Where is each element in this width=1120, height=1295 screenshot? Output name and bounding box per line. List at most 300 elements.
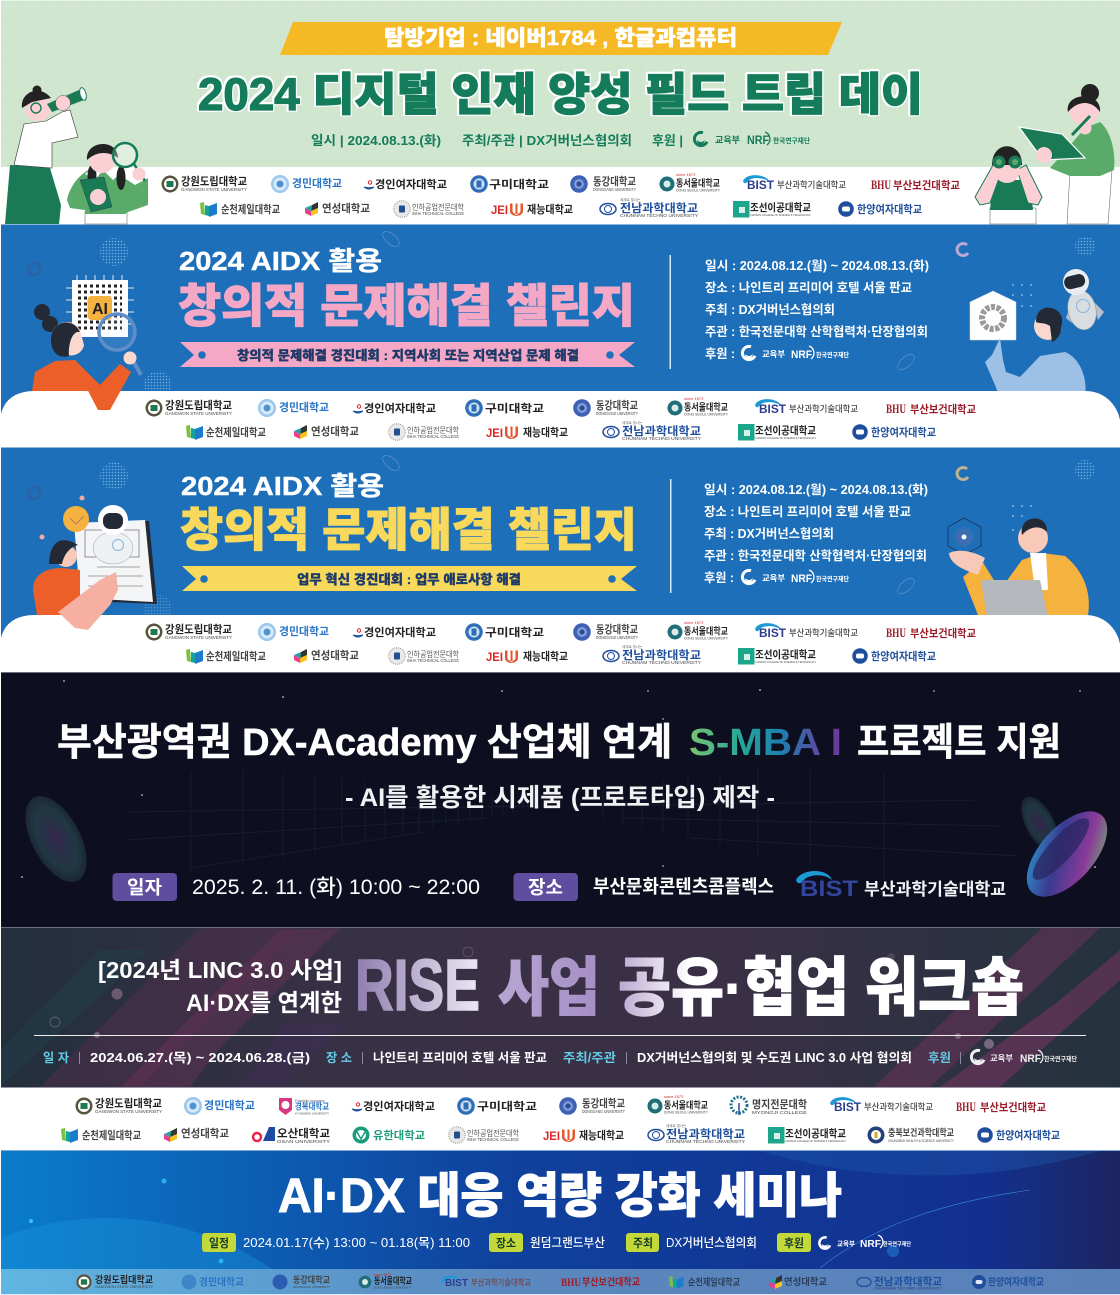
logo: JEI 재능대학교: 재능대학교 bbox=[523, 425, 568, 439]
logo: 순천제일대학교: 순천제일대학교 bbox=[221, 202, 280, 216]
logo: 강원도립대학교 bbox=[146, 398, 232, 416]
event details: NRF bbox=[791, 573, 812, 585]
logo: 전남과학대학교 bbox=[603, 420, 701, 441]
logo rows bbox=[61, 1094, 1060, 1144]
logo: 경민대학교 bbox=[184, 1097, 255, 1115]
schedule bbox=[202, 1233, 470, 1252]
event details: NRF bbox=[791, 349, 812, 361]
logo: 연성대학교: 연성대학교 bbox=[311, 424, 359, 438]
ribbon subtitle: 창의적 문제해결 경진대회 : 지역사회 또는 지역산업 문제 해결 bbox=[237, 348, 579, 363]
event info line: 교육부 bbox=[715, 135, 740, 145]
logo: 부산과학기술대학교 bbox=[755, 399, 858, 416]
logo: 동서울대학교: since 1973 bbox=[664, 1094, 684, 1099]
logo: 부산보건대학교: BHU bbox=[871, 177, 891, 192]
logo: 전남과학대학교: CHUNNAM TECHNO UNIVERSITY bbox=[622, 436, 701, 441]
banner 4 background bbox=[0, 672, 1120, 928]
banner 1 background bbox=[0, 0, 1120, 168]
BIST logo: 부산과학기술대학교 bbox=[864, 880, 1006, 899]
heading small: 2024 AIDX 활용 bbox=[181, 471, 384, 501]
logo: 인하공업전문대학: INHA TECHNICAL COLLEGE bbox=[407, 658, 459, 663]
logo: 경민대학교 bbox=[258, 623, 329, 641]
logo: 경민대학교 bbox=[182, 1274, 244, 1290]
logo: 동서울대학교 bbox=[668, 620, 729, 640]
logo: 연성대학교 bbox=[294, 424, 359, 439]
event details: 일시 : 2024.08.12.(월) ~ 2024.08.13.(화) bbox=[705, 258, 929, 273]
banner 1: field trip day bbox=[0, 0, 1120, 225]
logo: 동강대학교: 동강대학교 bbox=[582, 1096, 625, 1110]
logo: 강원도립대학교: GANGWON STATE UNIVERSITY bbox=[95, 1109, 162, 1114]
logo: 순천제일대학교 bbox=[186, 649, 266, 664]
banner 2 background bbox=[0, 225, 1120, 448]
logo: 강원도립대학교 bbox=[76, 1096, 162, 1114]
logo: 한양여자대학교 bbox=[838, 201, 922, 217]
logo: 순천제일대학교: 순천제일대학교 bbox=[688, 1276, 740, 1288]
logo: 구미대학교: 구미대학교 bbox=[489, 177, 549, 191]
logo: 경복대학교 bbox=[279, 1098, 329, 1116]
sponsor bbox=[777, 1233, 911, 1252]
logo: 조선이공대학교: 조선이공대학교 bbox=[755, 648, 816, 661]
event info line: DX거버넌스협의회 및 수도권 LINC 3.0 사업 협의회 bbox=[637, 1050, 912, 1065]
logo: 전남과학대학교: 전남과학대학교 bbox=[874, 1275, 942, 1288]
logo: 연성대학교: 연성대학교 bbox=[322, 201, 370, 215]
logo: 인하공업전문대학: INHA TECHNICAL COLLEGE bbox=[467, 1137, 519, 1142]
logo: 동강대학교 bbox=[573, 622, 638, 641]
logo: 부산과학기술대학교: 부산과학기술대학교 bbox=[789, 403, 858, 414]
white logo panel bbox=[0, 1088, 1120, 1150]
logo: 구미대학교 bbox=[465, 399, 544, 417]
logo: 조선이공대학교: CHOSUN COLLEGE OF SCIENCE & TECHNOLOGY bbox=[785, 1139, 846, 1143]
banner 5: RISE workshop bbox=[0, 928, 1120, 1150]
logo strip bbox=[0, 1269, 1120, 1294]
logo: 전남과학대학교: 세계로 빛나는 bbox=[620, 197, 641, 202]
logo: 연성대학교 bbox=[294, 648, 359, 663]
logo: 동서울대학교: DONG SEOUL UNIVERSITY bbox=[684, 636, 729, 640]
event details: 후원 : bbox=[705, 346, 735, 361]
logo: JEI 재능대학교: JEI bbox=[491, 203, 508, 217]
event info line: 주최/주관 | DX거버넌스협의회 bbox=[462, 133, 632, 148]
logo: 조선이공대학교 bbox=[733, 201, 811, 218]
illustration: boy with binoculars bbox=[975, 146, 1042, 224]
event details: 주관 : 한국전문대학 산학협력처·단장협의회 bbox=[704, 548, 927, 563]
logo: 경민대학교: 경민대학교 bbox=[279, 400, 329, 414]
logo: 오산대학교 bbox=[253, 1126, 330, 1144]
logo: 인하공업전문대학: INHA TECHNICAL COLLEGE bbox=[412, 211, 464, 216]
company ribbon bbox=[280, 22, 842, 55]
BIST logo bbox=[796, 871, 1006, 901]
logo: 한양여자대학교: 한양여자대학교 bbox=[857, 202, 922, 216]
date value: 2025. 2. 11. (화) 10:00 ~ 22:00 bbox=[192, 876, 480, 899]
logo: 부산보건대학교: 부산보건대학교 bbox=[980, 1100, 1046, 1114]
logo: 경민대학교: 경민대학교 bbox=[292, 176, 342, 190]
logo: 조선이공대학교 bbox=[738, 648, 816, 664]
sponsor: 한국연구재단 bbox=[883, 1240, 911, 1248]
main title bbox=[355, 946, 1024, 1026]
logo: 부산보건대학교: 부산보건대학교 bbox=[582, 1276, 640, 1288]
logo: 동강대학교: 동강대학교 bbox=[596, 398, 638, 412]
logo: 충북보건과학대학교: CHUNGBUK HEALTH & SCIENCE UNIVERSITY bbox=[888, 1139, 955, 1143]
logo: 동강대학교 bbox=[570, 174, 636, 193]
logo: 충북보건과학대학교 bbox=[868, 1126, 955, 1144]
title: 2024 디지털 인재 양성 필드 트립 데이 bbox=[198, 69, 923, 120]
logo: 충북보건과학대학교: 충북보건과학대학교 bbox=[888, 1127, 954, 1139]
decor: halftone and rings bbox=[28, 453, 1095, 623]
logo: 동강대학교: DONGGANG UNIVERSITY bbox=[596, 411, 638, 416]
event details: 주최 : DX거버넌스협의회 bbox=[704, 526, 834, 541]
sponsor: 교육부 bbox=[837, 1240, 856, 1248]
logo: 명지전문대학: MYONGJI COLLEGE bbox=[752, 1110, 807, 1115]
logo: 조선이공대학교: 조선이공대학교 bbox=[750, 201, 811, 214]
logo: 한양여자대학교: 한양여자대학교 bbox=[988, 1276, 1044, 1288]
logo: JEI 재능대학교: JEI bbox=[543, 1129, 560, 1143]
logo: 조선이공대학교: 조선이공대학교 bbox=[785, 1127, 846, 1140]
logo: 경민대학교 bbox=[271, 175, 342, 193]
logo: 부산과학기술대학교: BIST bbox=[834, 1100, 862, 1114]
event details: 교육부 bbox=[762, 349, 785, 359]
banner 5 background bbox=[0, 928, 1120, 1088]
logo: 순천제일대학교 bbox=[186, 425, 266, 440]
arm over panel bbox=[85, 364, 131, 410]
title: 부산광역권 DX-Academy 산업체 연계 bbox=[57, 722, 672, 764]
logo: 인하공업전문대학: 인하공업전문대학 bbox=[407, 425, 460, 435]
logo: 순천제일대학교: 순천제일대학교 bbox=[82, 1128, 141, 1142]
logo: 순천제일대학교: 순천제일대학교 bbox=[206, 649, 266, 663]
logo: 동서울대학교: DONG SEOUL UNIVERSITY bbox=[664, 1110, 709, 1114]
logo: 부산보건대학교: 부산보건대학교 bbox=[893, 178, 960, 192]
logo: 경복대학교: 경복대학교 bbox=[295, 1100, 329, 1112]
logo: 전남과학대학교: CHUNNAM TECHNO UNIVERSITY bbox=[620, 213, 698, 218]
logo: 경민대학교 bbox=[258, 399, 329, 417]
event info line: 후원 bbox=[928, 1050, 951, 1065]
logo: 전남과학대학교 bbox=[857, 1275, 943, 1290]
logo: 전남과학대학교: CHUNNAM TECHNO UNIVERSITY bbox=[622, 660, 701, 665]
logo: 전남과학대학교: CHUNNAM TECHNO UNIVERSITY bbox=[666, 1139, 745, 1144]
logo: 동서울대학교 bbox=[668, 396, 729, 416]
logo: 인하공업전문대학: INHA TECHNICAL COLLEGE bbox=[407, 434, 459, 439]
illustration: man with telescope bbox=[5, 86, 88, 224]
event info line bbox=[43, 1048, 1077, 1066]
event info line: 일시 | 2024.08.13.(화) bbox=[311, 133, 441, 148]
event details: 한국연구재단 bbox=[816, 350, 849, 359]
event info line: 한국연구재단 bbox=[1044, 1054, 1077, 1063]
schedule: 일정 bbox=[209, 1236, 229, 1250]
venue: 장소 bbox=[496, 1237, 516, 1250]
logo: 인하공업전문대학: 인하공업전문대학 bbox=[407, 649, 460, 659]
logo: JEI 재능대학교: 재능대학교 bbox=[527, 202, 573, 216]
host: 주최 bbox=[633, 1236, 653, 1250]
logo: 부산과학기술대학교: 부산과학기술대학교 bbox=[777, 179, 846, 190]
logo: 동서울대학교: since 1973 bbox=[374, 1273, 391, 1277]
logo: 구미대학교 bbox=[470, 175, 549, 193]
event details: 주관 : 한국전문대학 산학협력처·단장협의회 bbox=[705, 324, 928, 339]
decor: left blob bbox=[13, 786, 99, 892]
logo: 부산과학기술대학교 bbox=[830, 1097, 933, 1114]
main title: 사업 bbox=[498, 952, 600, 1024]
logo: 동서울대학교 bbox=[359, 1273, 412, 1290]
main title: 공유·협업 워크숍 bbox=[618, 952, 1024, 1024]
logo: 연성대학교 bbox=[769, 1275, 827, 1289]
logo: 전남과학대학교: 전남과학대학교 bbox=[666, 1127, 745, 1141]
logo: 강원도립대학교: GANGWON STATE UNIVERSITY bbox=[165, 635, 232, 640]
pointing arm bbox=[58, 572, 118, 630]
logo: 부산보건대학교 bbox=[886, 625, 976, 640]
logo: 강원도립대학교: 강원도립대학교 bbox=[95, 1096, 162, 1110]
logo: 전남과학대학교: 세계로 빛나는 bbox=[666, 1123, 687, 1128]
logo rows bbox=[146, 620, 976, 665]
logo: 부산과학기술대학교: 부산과학기술대학교 bbox=[864, 1101, 933, 1112]
logo: 조선이공대학교: 조선이공대학교 bbox=[755, 424, 816, 437]
ribbon subtitle bbox=[182, 566, 637, 591]
logo: JEI 재능대학교: 재능대학교 bbox=[579, 1128, 624, 1142]
logo: 강원도립대학교: 강원도립대학교 bbox=[165, 622, 232, 636]
logo: 순천제일대학교 bbox=[61, 1128, 141, 1143]
logo: 인하공업전문대학 bbox=[389, 648, 460, 664]
banner 3 background bbox=[0, 448, 1120, 672]
logo: 경복대학교: KYUNGBOK UNIVERSITY bbox=[295, 1112, 329, 1116]
logo: 동강대학교 bbox=[272, 1274, 330, 1290]
decor: diagonal bands bbox=[0, 928, 1120, 1087]
logo: 동서울대학교 bbox=[660, 172, 721, 192]
logo: 동서울대학교: DONG SEOUL UNIVERSITY bbox=[374, 1286, 412, 1290]
logo: 강원도립대학교: 강원도립대학교 bbox=[95, 1274, 153, 1286]
logo: 강원도립대학교: 강원도립대학교 bbox=[165, 398, 232, 412]
heading left: AI·DX를 연계한 bbox=[186, 990, 342, 1017]
logo: 순천제일대학교: 순천제일대학교 bbox=[206, 425, 266, 439]
logo: 부산보건대학교: BHU bbox=[561, 1275, 581, 1289]
event details: 일시 : 2024.08.12.(월) ~ 2024.08.13.(화) bbox=[704, 482, 928, 497]
venue: 원덤그랜드부산 bbox=[530, 1236, 605, 1250]
event details: 주최 : DX거버넌스협의회 bbox=[705, 302, 835, 317]
logo: 인하공업전문대학 bbox=[389, 424, 460, 440]
logo: 구미대학교: 구미대학교 bbox=[485, 625, 544, 639]
venue label: 장소 bbox=[528, 877, 563, 898]
logo: 동강대학교: DONGGANG UNIVERSITY bbox=[582, 1109, 625, 1114]
event details bbox=[705, 258, 929, 362]
logo: 동서울대학교: DONG SEOUL UNIVERSITY bbox=[676, 188, 721, 192]
logo: 동서울대학교: 동서울대학교 bbox=[684, 626, 728, 638]
logo: 전남과학대학교 bbox=[600, 197, 698, 218]
logo: 부산보건대학교 bbox=[956, 1099, 1046, 1114]
logo: 동강대학교: 동강대학교 bbox=[293, 1274, 330, 1285]
host: DX거버넌스협의회 bbox=[666, 1235, 757, 1250]
logo: 부산과학기술대학교 bbox=[755, 623, 858, 640]
logo: 구미대학교: 구미대학교 bbox=[485, 401, 544, 415]
logo: 부산보건대학교 bbox=[886, 401, 976, 416]
company ribbon: 탐방기업 : 네이버1784 , 한글과컴퓨터 bbox=[384, 27, 737, 50]
banner 4: S-MBA project support bbox=[0, 672, 1120, 928]
logo: 한양여자대학교 bbox=[852, 424, 936, 440]
sponsor: NRF bbox=[860, 1239, 881, 1250]
logo: 전남과학대학교: 전남과학대학교 bbox=[622, 648, 701, 662]
logo: 부산보건대학교: BHU bbox=[886, 625, 906, 640]
logo: 부산과학기술대학교: 부산과학기술대학교 bbox=[789, 627, 858, 638]
illustration: woman with book bbox=[1019, 84, 1114, 224]
logo: 구미대학교: 구미대학교 bbox=[477, 1099, 537, 1113]
logo: 동서울대학교: since 1973 bbox=[684, 620, 704, 625]
logo: 연성대학교: 연성대학교 bbox=[181, 1126, 229, 1140]
logo: 경민대학교: 경민대학교 bbox=[204, 1098, 255, 1112]
logo: 순천제일대학교 bbox=[669, 1276, 740, 1289]
logo: 경인여자대학교: 경인여자대학교 bbox=[375, 177, 447, 191]
title: S-MBA I bbox=[689, 722, 842, 764]
banner 1 logo strip background bbox=[0, 167, 1120, 224]
event details: 후원 : bbox=[704, 570, 734, 585]
logo: JEI 재능대학교 bbox=[491, 202, 573, 217]
logo: 명지전문대학: 명지전문대학 bbox=[752, 1097, 807, 1111]
schedule: 2024.01.17(수) 13:00 ~ 01.18(목) 11:00 bbox=[243, 1236, 470, 1250]
ribbon subtitle bbox=[180, 342, 635, 367]
logo: 부산과학기술대학교: 부산과학기술대학교 bbox=[471, 1278, 531, 1288]
logo: 부산보건대학교 bbox=[871, 177, 960, 192]
logo: 연성대학교 bbox=[164, 1126, 229, 1142]
logo: 강원도립대학교: GANGWON STATE UNIVERSITY bbox=[165, 411, 232, 416]
logo: 전남과학대학교: 전남과학대학교 bbox=[622, 424, 701, 438]
venue label bbox=[514, 873, 578, 901]
logo: JEI 재능대학교 bbox=[486, 425, 568, 440]
logo: JEI 재능대학교 bbox=[543, 1128, 624, 1143]
illustration: girl with magnifier bbox=[67, 143, 148, 224]
logo: 순천제일대학교 bbox=[200, 202, 280, 217]
event info line: 나인트리 프리미어 호텔 서울 판교 bbox=[373, 1051, 547, 1065]
logo: 동서울대학교 bbox=[648, 1094, 709, 1114]
sponsor: 후원 bbox=[784, 1236, 804, 1250]
logo: 부산보건대학교: 부산보건대학교 bbox=[910, 626, 976, 640]
logo: 경인여자대학교: 경인여자대학교 bbox=[363, 1099, 435, 1113]
logo: 한양여자대학교 bbox=[977, 1127, 1060, 1143]
event details: 장소 : 나인트리 프리미어 호텔 서울 판교 bbox=[704, 505, 911, 519]
logo: 동강대학교: DONGGANG UNIVERSITY bbox=[596, 635, 638, 640]
logo: 부산과학기술대학교: BIST bbox=[445, 1278, 468, 1289]
logo: 강원도립대학교: 강원도립대학교 bbox=[181, 174, 247, 188]
decor: right ring blob bbox=[1012, 791, 1120, 911]
logo: 전남과학대학교: 세계로 빛나는 bbox=[622, 420, 643, 425]
illustration: man with laptop and gear network bbox=[948, 505, 1089, 617]
logo: 한양여자대학교: 한양여자대학교 bbox=[871, 425, 936, 439]
logo: 부산과학기술대학교: BIST bbox=[747, 178, 775, 192]
event details: 교육부 bbox=[762, 573, 785, 583]
logo: 구미대학교 bbox=[457, 1097, 537, 1115]
logo: 한양여자대학교 bbox=[852, 648, 936, 664]
banner 3: AIDX challenge yellow bbox=[0, 448, 1120, 672]
logo: 조선이공대학교: CHOSUN COLLEGE OF SCIENCE & TECHNOLOGY bbox=[750, 213, 811, 217]
logo: 부산과학기술대학교 bbox=[441, 1276, 531, 1289]
title bbox=[57, 722, 1061, 764]
logo: 전남과학대학교 bbox=[603, 644, 701, 665]
BIST logo: BIST bbox=[800, 876, 859, 901]
decor: arcs and glows bbox=[0, 1151, 1100, 1269]
decor: halftone and rings bbox=[28, 229, 1095, 399]
venue bbox=[489, 1233, 605, 1252]
logo: 연성대학교: 연성대학교 bbox=[311, 648, 359, 662]
logo: 명지전문대학 bbox=[731, 1097, 807, 1115]
logo: 경민대학교: 경민대학교 bbox=[279, 624, 329, 638]
logo: 조선이공대학교: CHOSUN COLLEGE OF SCIENCE & TECHNOLOGY bbox=[755, 436, 816, 440]
logo: 인하공업전문대학: 인하공업전문대학 bbox=[467, 1128, 520, 1138]
title: AI·DX 대응 역량 강화 세미나 bbox=[278, 1170, 842, 1223]
heading main: 창의적 문제해결 챌린지 bbox=[180, 504, 637, 556]
logo: 동서울대학교: 동서울대학교 bbox=[684, 402, 728, 414]
event info line: 한국연구재단 bbox=[773, 136, 811, 145]
logo: 강원도립대학교 bbox=[162, 174, 247, 192]
logo: 인하공업전문대학: 인하공업전문대학 bbox=[412, 202, 465, 212]
logo: 부산과학기술대학교: BIST bbox=[759, 626, 787, 640]
logo: 구미대학교 bbox=[465, 623, 544, 641]
logo: 부산과학기술대학교: BIST bbox=[759, 402, 787, 416]
event details bbox=[704, 482, 928, 586]
logo: 인하공업전문대학 bbox=[449, 1127, 520, 1143]
event details: 장소 : 나인트리 프리미어 호텔 서울 판교 bbox=[705, 281, 912, 295]
logo: 동강대학교: DONGGANG UNIVERSITY bbox=[293, 1285, 330, 1289]
subtitle: - AI를 활용한 시제품 (프로토타입) 제작 - bbox=[345, 784, 775, 812]
white logo panel bbox=[0, 615, 1120, 672]
logo: 부산보건대학교: 부산보건대학교 bbox=[910, 402, 976, 416]
illustration: orange woman with AI chip: AI bbox=[92, 301, 108, 318]
banner 6 background bbox=[0, 1151, 1120, 1295]
logo: 동서울대학교: 동서울대학교 bbox=[676, 178, 720, 190]
event info line: 일 자 bbox=[43, 1051, 69, 1065]
logo: 전남과학대학교: 전남과학대학교 bbox=[620, 201, 698, 215]
logo: 동강대학교: 동강대학교 bbox=[596, 622, 638, 636]
stars bbox=[21, 680, 1096, 878]
logo: 동서울대학교: 동서울대학교 bbox=[374, 1275, 412, 1286]
event info line: NRF bbox=[1020, 1053, 1041, 1065]
ribbon subtitle: 업무 혁신 경진대회 : 업무 애로사항 해결 bbox=[297, 572, 521, 587]
logo: 오산대학교: OSAN UNIVERSITY bbox=[277, 1139, 330, 1144]
logo: 부산과학기술대학교 bbox=[743, 175, 846, 192]
logo: 경민대학교: 경민대학교 bbox=[199, 1276, 244, 1288]
date label: 일자 bbox=[127, 877, 162, 898]
white logo panel bbox=[0, 391, 1120, 448]
title: 프로젝트 지원 bbox=[857, 722, 1061, 764]
logo: 경복대학교: Futuristic Innovator bbox=[295, 1099, 326, 1103]
logo: 강원도립대학교 bbox=[76, 1274, 154, 1290]
logo: 강원도립대학교: GANGWON STATE UNIVERSITY bbox=[95, 1285, 154, 1289]
heading left: [2024년 LINC 3.0 사업] bbox=[98, 957, 342, 983]
logo: 연성대학교 bbox=[305, 201, 370, 216]
logo: 연성대학교: 연성대학교 bbox=[784, 1276, 827, 1288]
logo: 한양여자대학교: 한양여자대학교 bbox=[871, 649, 936, 663]
perspective grid bbox=[125, 768, 1020, 880]
logo: 전남과학대학교: CHUNNAM TECHNO UNIVERSITY bbox=[874, 1286, 943, 1290]
main title: RISE bbox=[355, 946, 480, 1026]
logo rows bbox=[146, 396, 976, 441]
logo: 오산대학교: 오산대학교 bbox=[277, 1126, 330, 1140]
logo: 유한대학교: 유한대학교 bbox=[373, 1128, 425, 1142]
logo: 전남과학대학교: 세계로 빛나는 bbox=[622, 644, 643, 649]
venue value: 부산문화콘텐츠콤플렉스 bbox=[593, 876, 774, 897]
logo: 동강대학교 bbox=[559, 1096, 625, 1115]
logo: 동서울대학교: DONG SEOUL UNIVERSITY bbox=[684, 412, 729, 416]
heading left bbox=[98, 957, 342, 1017]
logo: 부산보건대학교 bbox=[561, 1275, 640, 1289]
event info line: 주최/주관 bbox=[563, 1051, 617, 1065]
logo: 경인여자대학교: 경인여자대학교 bbox=[364, 625, 436, 639]
banner 2: AIDX challenge pink bbox=[0, 225, 1120, 448]
logo rows bbox=[162, 172, 960, 218]
illustration: man with gear and robot bbox=[970, 269, 1104, 398]
event details: 한국연구재단 bbox=[816, 574, 849, 583]
event info line: 후원 | bbox=[652, 133, 683, 148]
event info line: 장 소 bbox=[326, 1051, 352, 1065]
logo: 동서울대학교: 동서울대학교 bbox=[664, 1100, 708, 1112]
heading main: 창의적 문제해결 챌린지 bbox=[178, 280, 635, 332]
event info line: 2024.06.27.(목) ~ 2024.06.28.(금) bbox=[90, 1051, 310, 1065]
logo: 동서울대학교: since 1973 bbox=[684, 396, 704, 401]
illustration: orange woman with AI chip bbox=[32, 275, 141, 391]
logo: 한양여자대학교: 한양여자대학교 bbox=[996, 1128, 1060, 1142]
logo: 강원도립대학교 bbox=[146, 622, 232, 640]
logo: JEI 재능대학교: 재능대학교 bbox=[523, 649, 568, 663]
logo: JEI 재능대학교 bbox=[486, 649, 568, 664]
